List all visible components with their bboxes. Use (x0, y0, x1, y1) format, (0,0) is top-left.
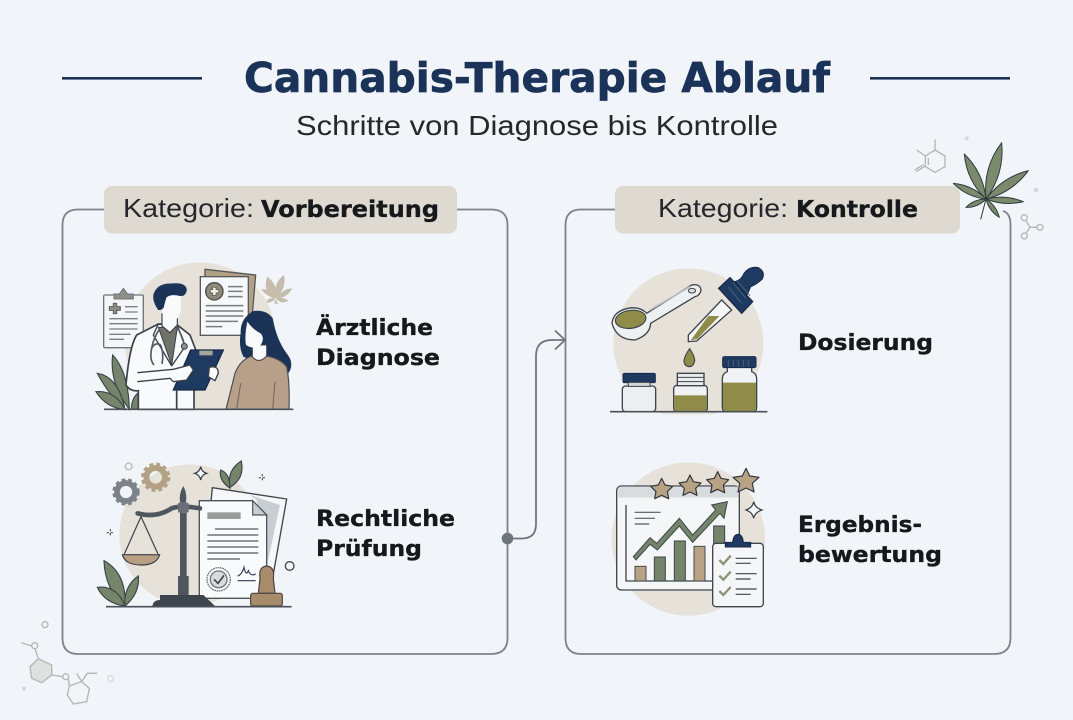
title: Cannabis-Therapie Ablauf (244, 54, 831, 102)
icon: gears (114, 464, 169, 504)
icon: documents (199, 488, 287, 598)
category tag: Kontrolle (615, 186, 960, 234)
label: Ergebnisbewertung: bewertung (798, 543, 942, 568)
illustration: doctor and patient (96, 262, 293, 414)
icon: left jar (622, 373, 656, 412)
category tag: Vorbereitung: Kategorie: (123, 193, 254, 223)
label: Rechtliche Prüfung (316, 507, 455, 562)
panel: Vorbereitung (62, 186, 508, 654)
icon: faded cannabis leaf (261, 275, 292, 304)
icon: left clipboard (104, 288, 143, 348)
icon: small molecule (1021, 215, 1043, 239)
label: Ergebnisbewertung: Ergebnis- (798, 513, 922, 538)
icon: measuring spoon (612, 285, 701, 340)
label: Ärztliche Diagnose: Diagnose (316, 346, 440, 371)
label: Ärztliche Diagnose: Ärztliche (316, 315, 433, 341)
label: Ärztliche Diagnose (316, 315, 440, 371)
category tag: Kontrolle: Kategorie: (658, 193, 788, 223)
category tag: Kontrolle: Kontrolle (796, 197, 918, 223)
icon: molecule hexagon (915, 139, 945, 172)
arrow: connector between panels (502, 330, 565, 544)
label: Rechtliche Prüfung: Rechtliche (316, 507, 455, 532)
title rule left (62, 77, 202, 80)
label: Dosierung: Dosierung (798, 331, 933, 356)
icon: plant (97, 561, 138, 606)
chart window (617, 486, 739, 590)
header (62, 54, 1010, 141)
label: Rechtliche Prüfung: Prüfung (316, 537, 422, 562)
patient (226, 311, 291, 409)
illustration: dosing (610, 267, 767, 418)
icon: sparkles (107, 463, 294, 570)
category tag: Vorbereitung: Vorbereitung (261, 197, 439, 223)
icon: sparkle (746, 502, 762, 518)
icon: oil drop (684, 349, 695, 367)
icon: leaves top (220, 461, 242, 488)
icon: right jar (722, 357, 757, 412)
icon: dropper (688, 267, 763, 342)
icon: medical documents (200, 269, 256, 335)
icon: cannabis leaf and molecules top right (915, 136, 1043, 239)
clipboard checklist (713, 534, 763, 607)
category tag: Vorbereitung (104, 186, 457, 234)
illustration: results evaluation (612, 462, 765, 616)
icon: stamp (251, 566, 282, 606)
icon: scales of justice (122, 486, 215, 606)
title rule right (870, 77, 1010, 80)
icon: middle jar (674, 373, 707, 412)
subtitle: Schritte von Diagnose bis Kontrolle (296, 110, 778, 141)
icon: plant (96, 355, 140, 409)
icon: molecule bottom left (21, 622, 114, 704)
stars (651, 468, 759, 499)
panel: Kontrolle (566, 186, 1010, 654)
doctor (126, 284, 223, 409)
illustration: legal review (97, 461, 294, 607)
label: Ergebnisbewertung (798, 513, 942, 568)
icon: cannabis leaf (953, 143, 1028, 219)
